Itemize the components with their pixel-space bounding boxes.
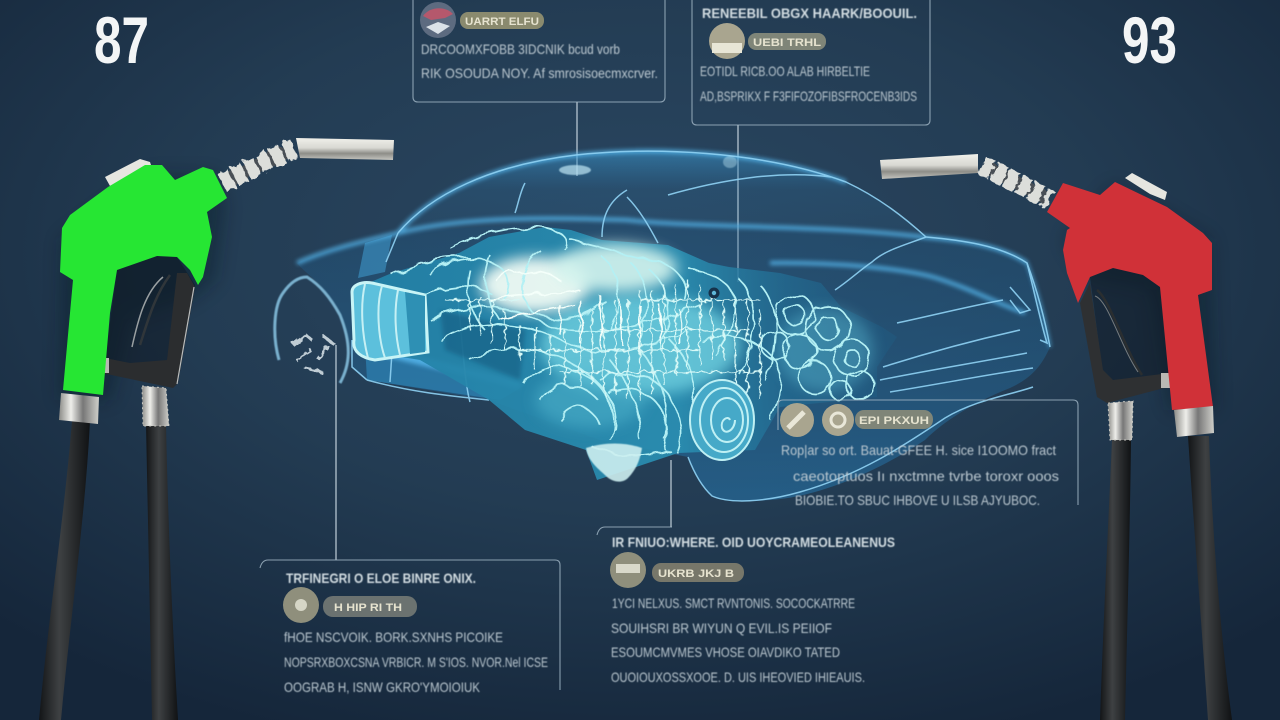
- icon: badge: [709, 23, 745, 59]
- pill label: [323, 596, 417, 617]
- panel: bottom centre note: [597, 527, 895, 685]
- note text: RIK OSOUDA NOY. Af smrosisoecmxcrver.: [421, 65, 658, 81]
- heading: IR FNIUO:WHERE. OID UOYCRAMEOLEANENUS: [612, 534, 895, 550]
- trigger guard: [1080, 283, 1171, 403]
- note text: OUOIOUXOSSXOOE. D. UIS IHEOVIED IHIEAUIS.: [611, 669, 865, 685]
- note text: caeotoptuos Iı nxctmne tvrbe toroxr ooos: [793, 468, 1059, 484]
- note text: OOGRAB H, ISNW GKRO'YMOIOIUK: [284, 679, 481, 695]
- cap: [1125, 173, 1167, 200]
- engine: front pulley: [690, 380, 754, 460]
- note text: SOUIHSRI BR WIYUN Q EVIL.IS PEIIOF: [611, 620, 832, 636]
- icon: badge: [420, 2, 456, 38]
- engine: glowing wireframe block: [352, 227, 897, 482]
- note text: [781, 442, 1059, 508]
- pill label: H HIP RI TH: [334, 602, 402, 614]
- note text: [611, 595, 865, 685]
- spout pipe: [880, 154, 978, 179]
- pill label: EPI PKXUH: [859, 415, 929, 427]
- green pump nozzle (87): [39, 138, 394, 720]
- hose coupling: [1108, 401, 1133, 440]
- pill label: UKRB JKJ B: [658, 568, 734, 580]
- pill label: [855, 410, 933, 429]
- panel: top right note: [692, 0, 930, 125]
- pill label: UEBI TRHL: [753, 37, 821, 49]
- cap: [105, 159, 152, 186]
- note text: AD,BSPRIKX F F3FIFOZOFIBSFROCENB3IDS: [700, 88, 917, 104]
- note text: [284, 629, 548, 695]
- panel: bottom left note: [260, 560, 560, 695]
- pill label: [460, 12, 544, 29]
- note text: Rop|ar so ort. Bauat-GFEE H. sice I1OOMO fract: [781, 442, 1056, 458]
- flexible spring: [222, 148, 294, 183]
- green body: [60, 165, 227, 395]
- engine: tangled pipes and lines: [392, 227, 874, 455]
- note text: ESOUMCMVMES VHOSE OIAVDIKO TATED: [611, 644, 840, 660]
- car: translucent blue wireframe: [275, 151, 1050, 501]
- hoses: [1100, 436, 1232, 720]
- pill label: [748, 33, 826, 50]
- note text: [421, 41, 658, 81]
- hoses: [39, 421, 178, 720]
- spout pipe: [296, 138, 394, 160]
- rear wheel: [275, 277, 348, 383]
- collar: [1174, 406, 1214, 437]
- collar: [59, 393, 99, 424]
- note text: [700, 63, 917, 104]
- engine: sensor dot: [708, 288, 720, 298]
- pill label: [652, 563, 744, 582]
- hose coupling: [142, 386, 169, 426]
- pill label: UARRT ELFU: [465, 16, 539, 28]
- heading: TRFINEGRI O ELOE BINRE ONIX.: [286, 570, 476, 586]
- engine: oil pan drip: [586, 444, 642, 482]
- note text: 1YCI NELXUS. SMCT RVNTONIS. SOCOCKATRRE: [612, 595, 855, 611]
- label: grade 87: 87: [94, 3, 149, 77]
- handle opening: [105, 256, 195, 385]
- note text: BIOBIE.TO SBUC IHBOVE U ILSB AJYUBOC.: [795, 492, 1040, 508]
- heading: RENEEBIL OBGX HAARK/BOOUIL.: [702, 5, 917, 21]
- red pump nozzle (93): [880, 154, 1232, 720]
- connector lines: [336, 102, 738, 560]
- icon: wrench badge: [780, 403, 814, 437]
- note text: DRCOOMXFOBB 3IDCNIK bcud vorb: [421, 41, 620, 57]
- engine: bright upper block: [480, 257, 590, 313]
- icon: badge: [610, 552, 646, 588]
- note text: fHOE NSCVOIK. BORK.SXNHS PICOIKE: [284, 629, 503, 645]
- icon: gauge badge: [822, 404, 854, 436]
- label: grade 93: 93: [1122, 3, 1177, 77]
- handle opening: [1090, 268, 1170, 390]
- note text: EOTIDL RICB.OO ALAB HIRBELTIE: [700, 63, 870, 79]
- panel: top left note: [413, 0, 665, 102]
- engine: radiator cylinder: [352, 282, 428, 360]
- red body: [1047, 182, 1213, 410]
- flexible spring: [982, 165, 1050, 200]
- note text: NOPSRXBOXCSNA VRBICR. M S'IOS. NVOR.Nel ICSE: [284, 654, 548, 670]
- trigger guard: [100, 273, 195, 388]
- panel: right note: [778, 400, 1078, 508]
- icon: badge: [283, 587, 319, 623]
